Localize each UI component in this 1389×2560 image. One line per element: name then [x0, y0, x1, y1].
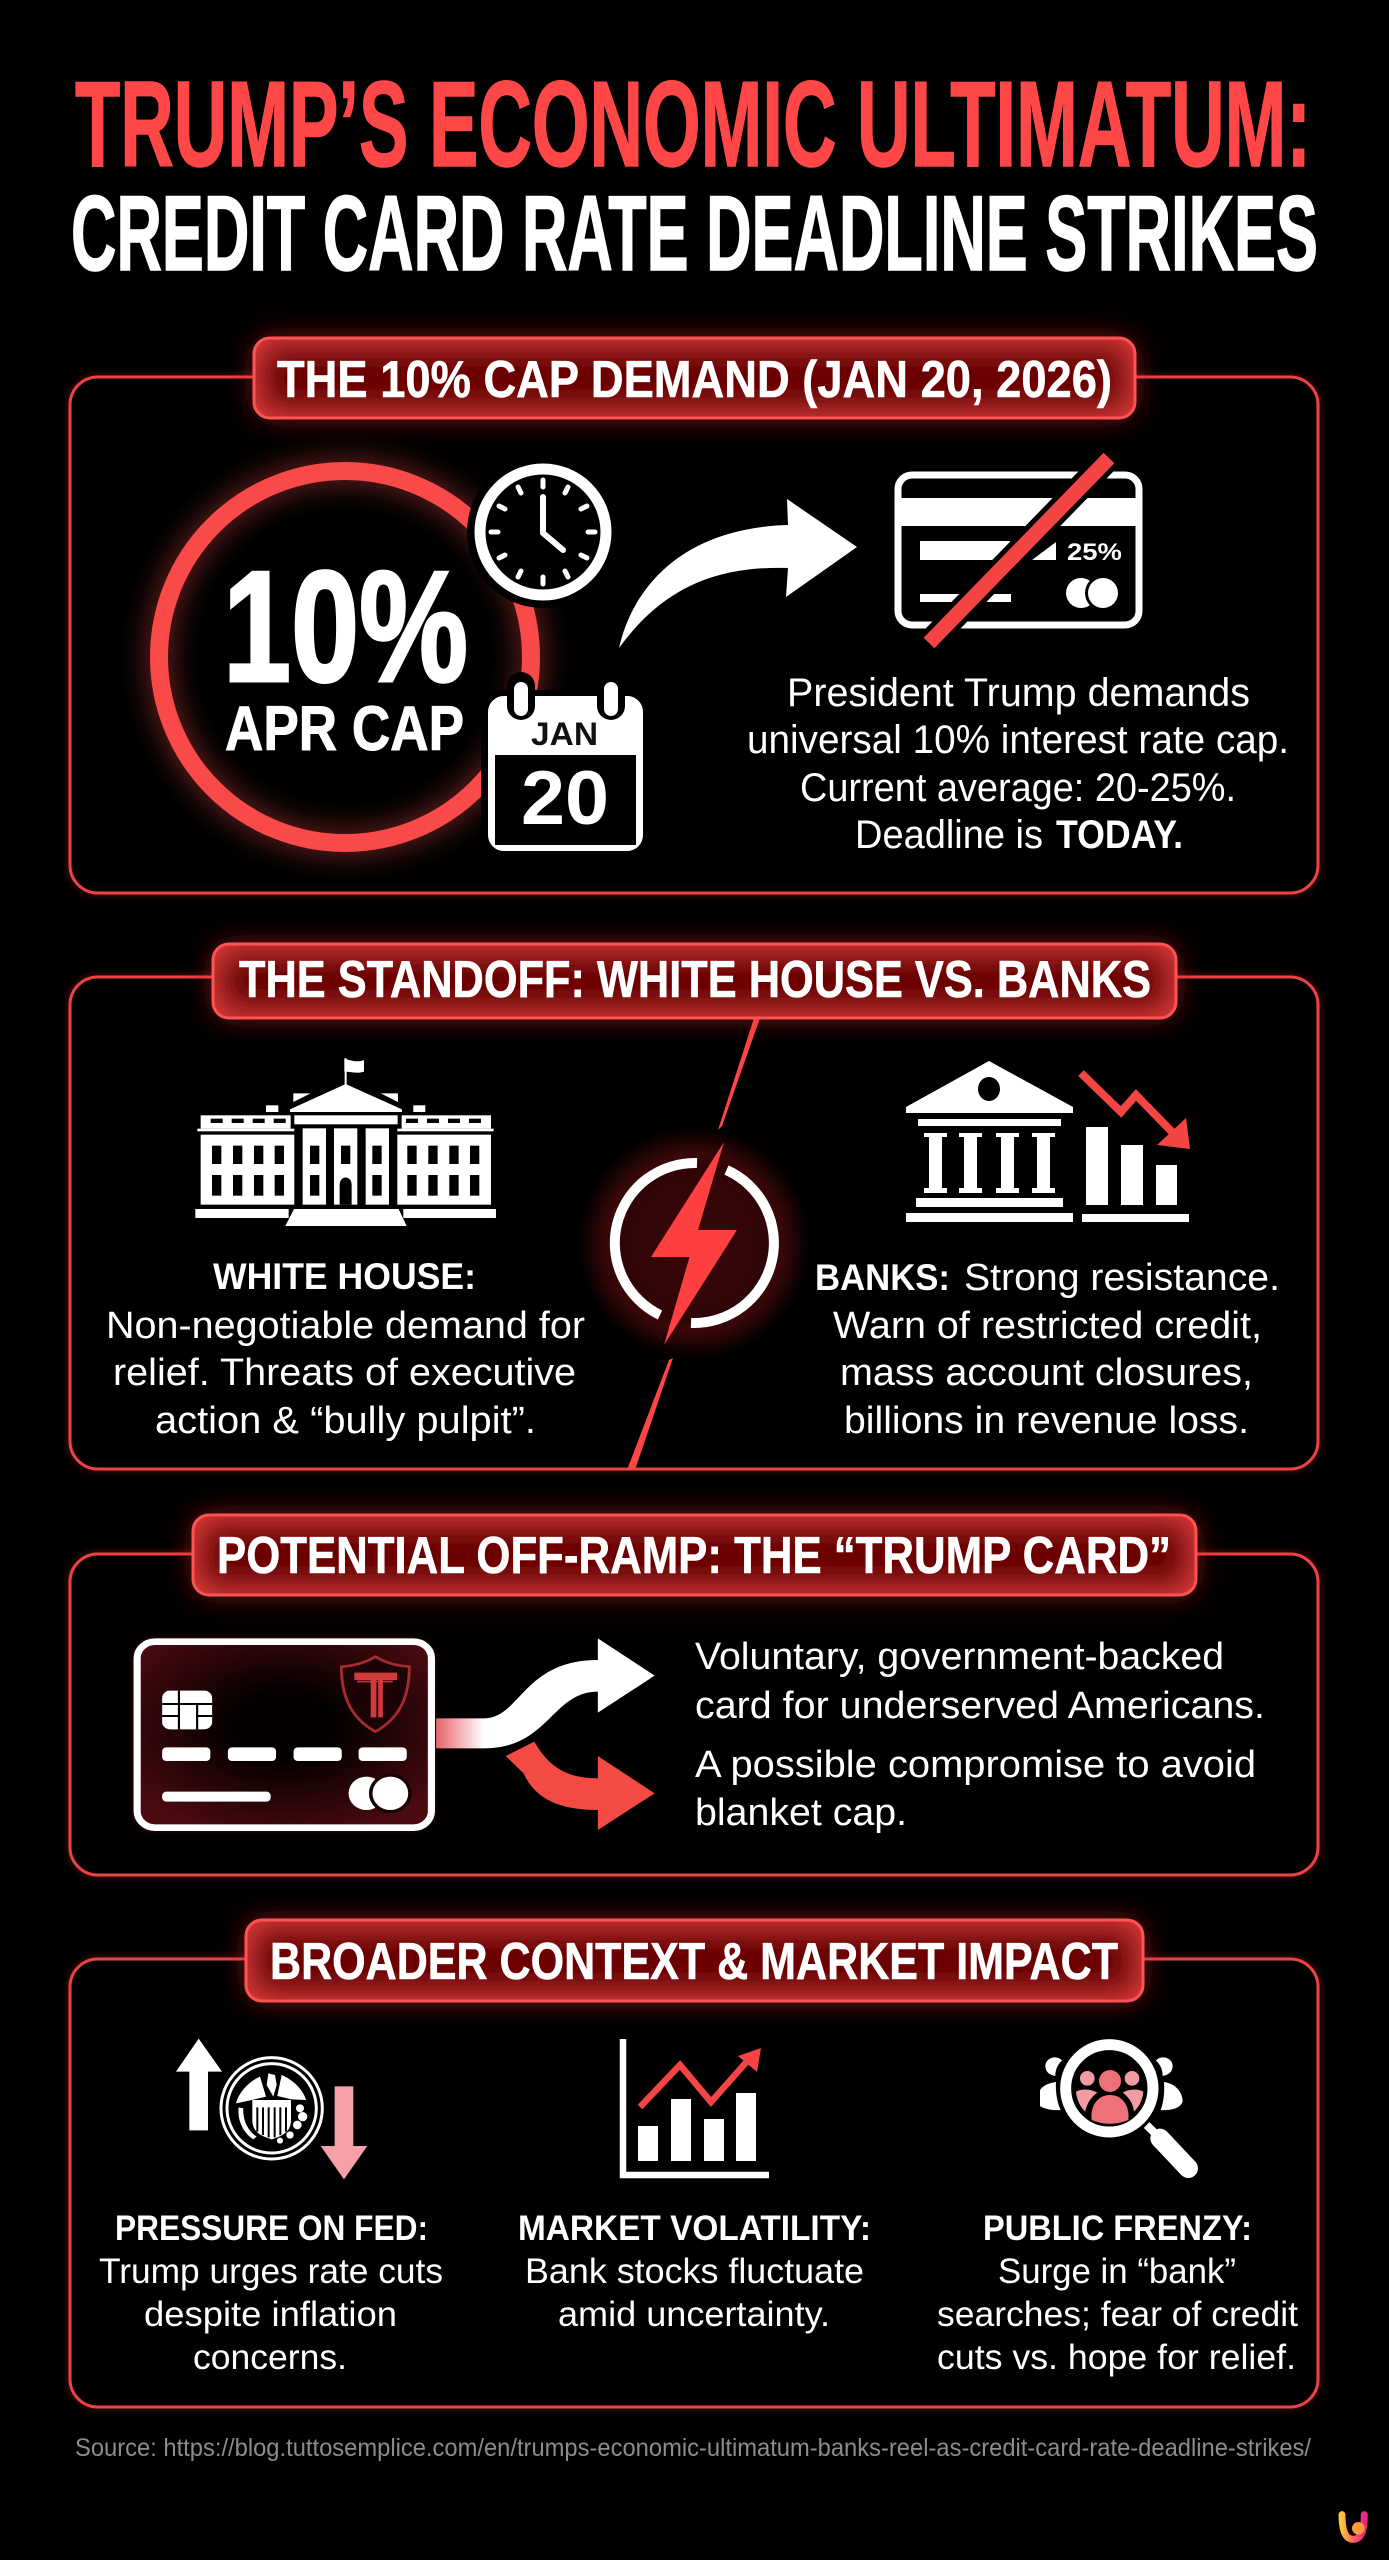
heading: the 10% cap demand — [254, 338, 1135, 418]
heading: the 10% cap demand: THE 10% CAP DEMAND (JAN 20, 2026) — [277, 351, 1112, 409]
text: banks: mass account closures, — [840, 1352, 1253, 1394]
title — [71, 56, 1318, 293]
text: demand description: universal 10% interest rate cap. — [747, 718, 1289, 762]
text: off-ramp description: blanket cap. — [695, 1792, 907, 1834]
text: white house — [106, 1256, 585, 1442]
text: public frenzy: Surge in “bank” — [998, 2252, 1236, 2291]
icon: market chart — [623, 2039, 769, 2175]
heading: potential off-ramp: POTENTIAL OFF-RAMP: THE “TRUMP CARD” — [217, 1527, 1171, 1585]
icon: clock — [467, 456, 619, 608]
text: white house: action & “bully pulpit”. — [155, 1400, 536, 1442]
text: white house: relief. Threats of executive — [113, 1352, 576, 1394]
ring: 10% APR cap: APR CAP — [225, 694, 464, 764]
heading: the standoff: THE STANDOFF: WHITE HOUSE VS. BANKS — [239, 951, 1151, 1009]
panel: the 10% cap demand — [70, 338, 1318, 893]
icon: white house — [195, 1058, 496, 1226]
text: banks — [815, 1257, 1280, 1442]
icon: fed seal with arrows — [176, 2039, 367, 2179]
text: market volatility — [518, 2209, 871, 2334]
text: banks: Strong resistance. — [964, 1257, 1280, 1299]
text: market volatility: amid uncertainty. — [558, 2295, 830, 2334]
source note: Source: https://blog.tuttosemplice.com/en/trumps-economic-ultimatum-banks-reel-as-credit-card-rate-deadline-strikes/ — [75, 2434, 1311, 2462]
text: market volatility: Bank stocks fluctuate — [525, 2252, 864, 2291]
text: banks: billions in revenue loss. — [844, 1400, 1249, 1442]
text: pressure on Fed: concerns. — [193, 2338, 347, 2377]
text: demand description: Deadline is — [855, 813, 1043, 857]
text: off-ramp description — [695, 1636, 1265, 1834]
heading: the standoff — [213, 944, 1176, 1018]
icon: Trump card — [137, 1642, 431, 1828]
icon: logo mark — [1342, 2515, 1365, 2539]
text: public frenzy: PUBLIC FRENZY: — [983, 2209, 1252, 2248]
text: banks: Warn of restricted credit, — [833, 1305, 1262, 1347]
icon: calendar Jan 20: JAN — [531, 716, 598, 752]
panel: potential off-ramp — [70, 1515, 1318, 1875]
icon: magnifier with people — [1040, 2045, 1188, 2168]
text: demand description: President Trump demands — [787, 671, 1250, 715]
text: off-ramp description: card for underserved Americans. — [695, 1685, 1265, 1727]
text: white house: Non-negotiable demand for — [106, 1305, 585, 1347]
text: off-ramp description: A possible compromise to avoid — [695, 1744, 1256, 1786]
icon: crossed-out credit card: 25% — [1067, 539, 1122, 566]
text: public frenzy: cuts vs. hope for relief. — [937, 2338, 1296, 2377]
text: demand description: Current average: 20-25%. — [800, 766, 1236, 810]
icon: lightning clash — [578, 1127, 810, 1359]
divider: lightning crack — [627, 1018, 760, 1470]
text: public frenzy — [937, 2209, 1298, 2377]
heading: broader context: BROADER CONTEXT & MARKET IMPACT — [270, 1933, 1118, 1991]
arrow: white path — [436, 1638, 655, 1748]
icon: calendar Jan 20 — [481, 672, 650, 858]
text: market volatility: MARKET VOLATILITY: — [518, 2209, 871, 2248]
text: public frenzy: searches; fear of credit — [937, 2295, 1298, 2334]
text: banks: BANKS: — [815, 1257, 950, 1298]
icon: crossed-out credit card — [898, 458, 1139, 643]
text: off-ramp description: Voluntary, government-backed — [695, 1636, 1224, 1678]
text: pressure on Fed: Trump urges rate cuts — [99, 2252, 443, 2291]
panel: the standoff — [70, 944, 1318, 1470]
text: demand description: TODAY. — [1056, 813, 1183, 857]
panel: broader context — [70, 1920, 1318, 2407]
arrow: curved to card — [619, 499, 857, 648]
text: pressure on Fed: PRESSURE ON FED: — [115, 2209, 428, 2248]
icon: bank with falling chart — [906, 1061, 1190, 1222]
icon: calendar Jan 20: 20 — [521, 756, 609, 841]
text: pressure on Fed: despite inflation — [144, 2295, 397, 2334]
text: demand description — [747, 671, 1289, 857]
heading: potential off-ramp — [193, 1515, 1196, 1595]
heading: broader context — [246, 1920, 1143, 2001]
ring: 10% APR cap: 10% — [223, 539, 468, 715]
arrow: red path — [506, 1742, 655, 1830]
text: pressure on Fed — [99, 2209, 443, 2377]
ring: 10% APR cap — [159, 471, 531, 843]
text: white house: WHITE HOUSE: — [213, 1256, 476, 1297]
